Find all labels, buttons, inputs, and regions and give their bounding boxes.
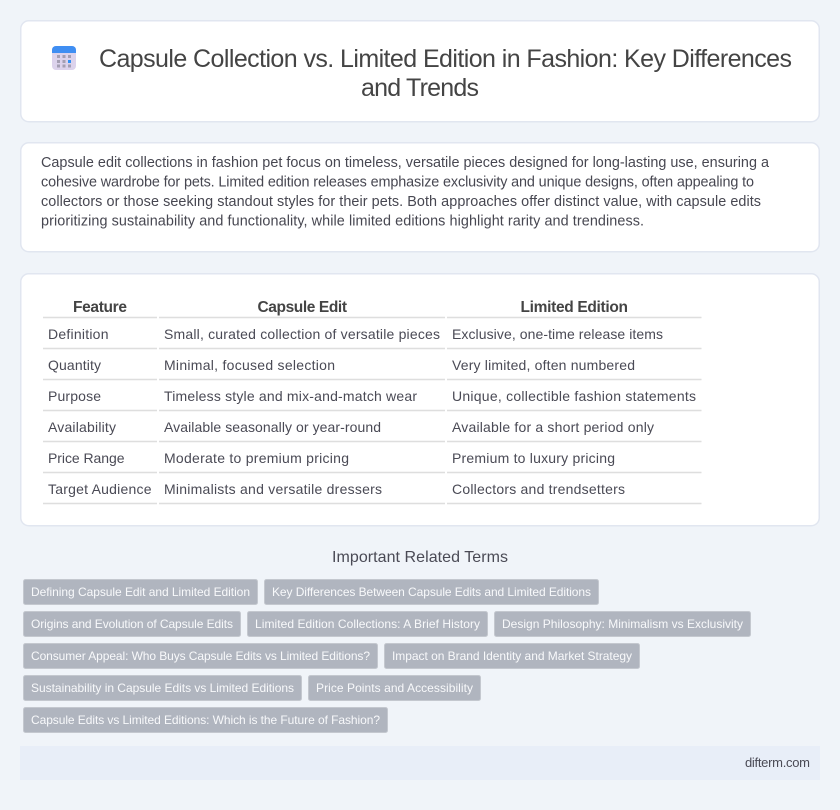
tag [494,612,750,636]
intro text: collectors or those seeking standout styles for their pets. Both approaches offer distinct value, with capsule edits [41,194,761,210]
footer site name: difterm.com [745,755,810,770]
row: price range: Premium to luxury pricing [452,450,615,466]
title: and Trends [361,74,479,102]
intro text: cohesive wardrobe for pets. Limited edition releases emphasize exclusivity and unique designs, often appealing to [41,174,754,190]
tag [248,612,488,636]
row: definition: Exclusive, one-time release items [452,326,663,342]
row: purpose: Timeless style and mix-and-match wear [164,388,417,404]
tag: Capsule Edits vs Limited Editions: Which is the Future of Fashion? [31,713,380,727]
row: availability [48,419,654,435]
intro text [41,155,769,230]
tag [264,580,598,604]
heading: important related terms: Important Related Terms [332,549,508,566]
row: quantity: Quantity [48,357,101,373]
title: Capsule Collection vs. Limited Edition in Fashion: Key Differences [99,45,792,73]
tag [24,644,378,668]
row: availability: Availability [48,419,116,435]
tag: Consumer Appeal: Who Buys Capsule Edits vs Limited Editions? [31,649,370,663]
tag: Defining Capsule Edit and Limited Edition [31,585,250,599]
row: purpose [48,388,696,404]
row: target audience: Collectors and trendsetters [452,481,625,497]
tag [384,644,640,668]
table header row: Feature [73,299,127,316]
tag: Design Philosophy: Minimalism vs Exclusivity [502,617,743,631]
icon: calendar [52,46,76,70]
row: quantity [48,357,635,373]
row: purpose: Unique, collectible fashion statements [452,388,696,404]
intro text: prioritizing sustainability and functionality, while limited editions highlight rarity and trendiness. [41,214,644,230]
row: definition [48,326,663,342]
row: target audience: Target Audience [48,481,152,497]
tag [24,708,388,732]
tag [24,676,302,700]
table header row [73,299,628,316]
tag [308,676,480,700]
tag: Limited Edition Collections: A Brief History [255,617,480,631]
row: purpose: Purpose [48,388,101,404]
panel: comparison table [21,274,819,526]
row: availability: Available seasonally or year-round [164,419,381,435]
tag: Sustainability in Capsule Edits vs Limited Editions [31,681,294,695]
row: definition: Small, curated collection of versatile pieces [164,326,440,342]
tag [24,612,240,636]
tag: Impact on Brand Identity and Market Strategy [392,649,632,663]
panel: introduction [21,143,819,252]
row: target audience: Minimalists and versatile dressers [164,481,382,497]
row: availability: Available for a short period only [452,419,654,435]
tag [24,580,258,604]
tag: Origins and Evolution of Capsule Edits [31,617,233,631]
tag: Price Points and Accessibility [316,681,473,695]
intro text: Capsule edit collections in fashion pet focus on timeless, versatile pieces designed for long-lasting use, ensuring a [41,155,769,171]
related term tags [24,580,750,732]
footer bar [20,746,820,780]
row: price range [48,450,615,466]
row: price range: Price Range [48,450,125,466]
row: price range: Moderate to premium pricing [164,450,349,466]
row: target audience [48,481,625,497]
row: definition: Definition [48,326,108,342]
tag: Key Differences Between Capsule Edits and Limited Editions [272,585,591,599]
table header row: Limited Edition [520,299,628,316]
table header row: Capsule Edit [258,299,347,316]
row: quantity: Very limited, often numbered [452,357,635,373]
row: quantity: Minimal, focused selection [164,357,335,373]
title [99,45,792,102]
header panel [21,21,819,122]
